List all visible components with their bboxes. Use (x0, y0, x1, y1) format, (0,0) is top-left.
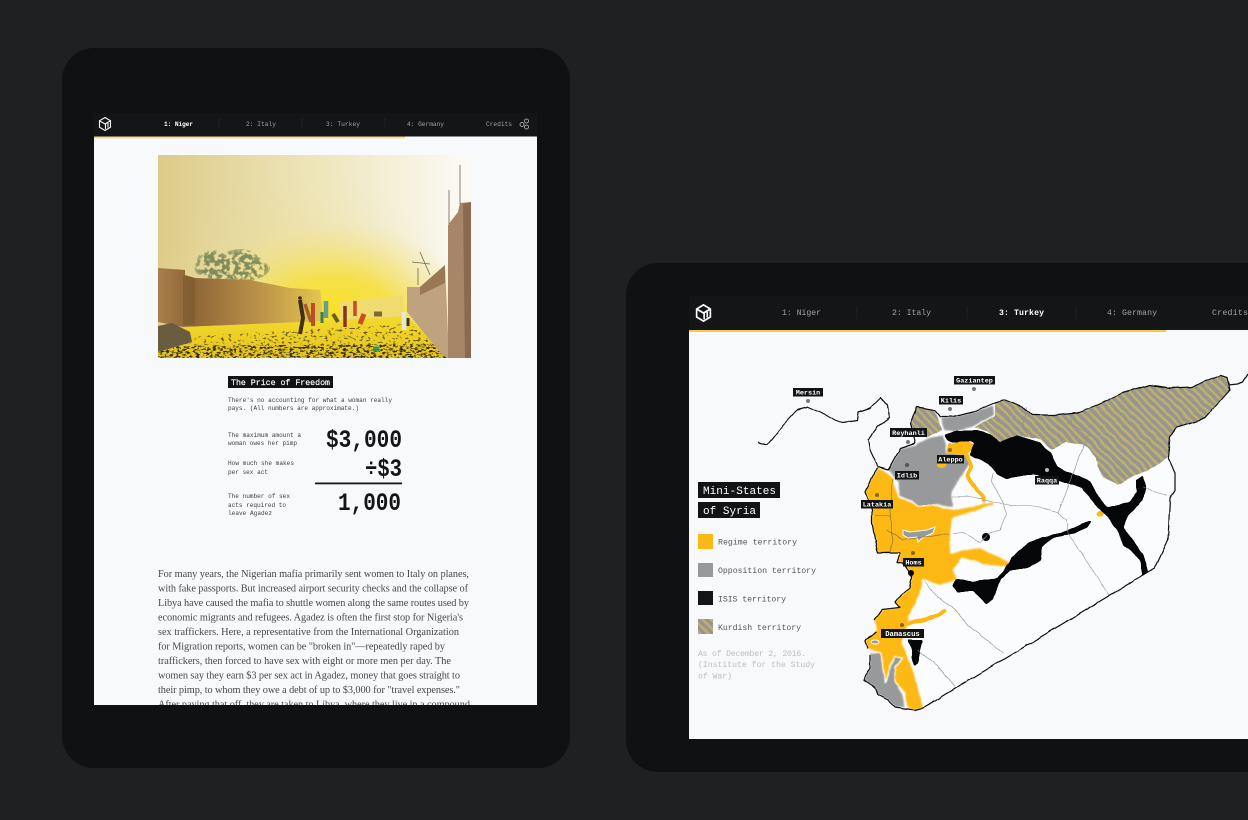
label: Mersin: Mersin (796, 390, 820, 398)
label: Gaziantep: Gaziantep (956, 378, 993, 386)
label: Mersin (793, 388, 823, 396)
map of Syria (758, 374, 1248, 710)
nav item: Turkey: 3: Turkey (999, 308, 1044, 318)
country base (863, 375, 1230, 710)
icon: share (520, 119, 528, 129)
left wall (158, 268, 322, 327)
article paragraph: traffickers, then forced to have sex with eight or more men per day. The (158, 656, 451, 667)
legend: Kurdish (698, 619, 801, 634)
label: Idlib: Idlib (897, 473, 917, 481)
label: Raqqa (1035, 476, 1059, 484)
nav item: Credits: Credits (486, 121, 512, 128)
navigation bar (689, 296, 1248, 330)
legend: opposition: Opposition territory (718, 566, 816, 576)
label: Gaziantep (954, 376, 995, 384)
division rule (315, 482, 402, 484)
reading progress bar (689, 330, 1166, 332)
row: result: 1,000 (338, 489, 401, 518)
city dots (806, 387, 1049, 627)
row: maximum debt: $3,000 (326, 426, 402, 455)
label: Reyhanli: Reyhanli (892, 430, 925, 438)
legend title (698, 482, 780, 518)
tablet bezel (626, 263, 1248, 772)
opposition territory (863, 405, 995, 707)
label: Aleppo: Aleppo (938, 457, 963, 465)
article paragraph: economic migrants and refugees. Agadez is often the first stop for Nigeria's (158, 612, 463, 624)
label: Aleppo (937, 455, 964, 464)
article paragraph: Libya have caused the mafia to shuttle women along the same routes used by (158, 598, 470, 609)
turkish coast line (758, 374, 1248, 467)
article paragraph: sex traffickers. Here, a representative from the International Organization (158, 627, 459, 638)
article paragraph (158, 569, 471, 710)
panel heading: The Price of Freedom (231, 378, 330, 388)
tablet screen (94, 113, 537, 705)
panel intro (228, 397, 392, 412)
row: result (228, 489, 401, 518)
legend: regime (698, 534, 797, 549)
article paragraph: with fake passports. But increased airport security checks and the collapse of (158, 584, 469, 594)
map legend (698, 482, 816, 682)
label: Latakia (861, 500, 893, 508)
article paragraph: women say they earn $3 per sex act in Agadez, money that goes straight to (158, 670, 460, 682)
legend title: Mini-States (703, 486, 776, 498)
label: Damascus (881, 629, 924, 639)
people (298, 296, 408, 334)
nav item: Italy: 2: Italy (246, 121, 276, 128)
reading progress bar (94, 136, 405, 138)
label: Idlib (895, 471, 919, 480)
legend: ISIS: ISIS territory (718, 594, 786, 604)
row: result: leave Agadez (228, 510, 272, 517)
photo: street in Agadez (158, 155, 471, 358)
row: per sex act: How much she makes (228, 460, 294, 467)
ground (158, 316, 452, 358)
article paragraph: for Migration reports, women can be "broken in"—repeatedly raped by (158, 642, 446, 652)
antennas (412, 165, 460, 285)
ISIS pockets (908, 533, 990, 576)
legend: ISIS (698, 591, 786, 605)
row: result: acts required to (228, 502, 286, 509)
source note: As of December 2, 2016. (698, 649, 806, 659)
nav item: Niger: 1: Niger (782, 308, 821, 318)
far buildings (340, 295, 403, 322)
row: per sex act (228, 455, 402, 484)
right walls (407, 265, 449, 358)
navigation bar (94, 113, 537, 136)
label: Homs (903, 558, 924, 566)
legend: Kurdish: Kurdish territory (718, 623, 801, 633)
nav item: Germany: 4: Germany (407, 121, 444, 128)
nav item: Italy: 2: Italy (892, 308, 931, 318)
row: result: The number of sex (228, 493, 290, 500)
panel intro: There's no accounting for what a woman really (228, 397, 392, 404)
tablet screen (689, 296, 1248, 739)
data panel: The Price of Freedom (228, 376, 402, 518)
panel intro: pays. (All numbers are approximate.) (228, 405, 359, 412)
row: per sex act: ÷$3 (365, 455, 402, 484)
row: maximum debt: woman owes her pimp (228, 440, 297, 447)
article paragraph: For many years, the Nigerian mafia primarily sent women to Italy on planes, (158, 569, 469, 580)
legend: opposition (698, 563, 816, 577)
row: per sex act: per sex act (228, 469, 268, 476)
tablet bezel (62, 48, 570, 768)
source note: of War) (698, 672, 732, 682)
article paragraph: After paying that off, they are taken to Libya, where they live in a compound (158, 700, 471, 710)
legend title: of Syria (703, 506, 756, 518)
label: Latakia: Latakia (863, 502, 891, 510)
article paragraph: their pimp, to whom they owe a debt of up to $3,000 for "travel expenses." (158, 685, 460, 696)
Kurdish territory (910, 375, 1230, 485)
opposition pockets (871, 527, 935, 644)
ISIS territory (908, 431, 1148, 665)
icon: logo (100, 118, 110, 130)
legend: regime: Regime territory (718, 538, 797, 548)
tree (194, 249, 270, 283)
debris (158, 324, 452, 358)
label: Kilis (939, 396, 963, 404)
row: maximum debt (228, 426, 402, 455)
regime territory (865, 440, 1104, 710)
left tablet (62, 48, 570, 768)
label: Kilis: Kilis (941, 398, 961, 406)
icon: logo (697, 305, 710, 321)
nav item: Germany: 4: Germany (1107, 309, 1157, 318)
nav item: Niger: 1: Niger (164, 121, 193, 128)
row: maximum debt: The maximum amount a (228, 432, 301, 439)
label: Raqqa: Raqqa (1037, 478, 1057, 486)
right tablet (626, 263, 1248, 772)
label: Damascus: Damascus (885, 631, 920, 639)
label: Homs: Homs (905, 560, 922, 568)
country border (863, 375, 1230, 710)
source note: (Institute for the Study (698, 660, 815, 670)
source note (698, 649, 815, 682)
rubble (158, 323, 192, 352)
nav item: Turkey: 3: Turkey (326, 121, 360, 128)
provincial borders (875, 407, 1170, 687)
nav item: Credits: Credits (1212, 308, 1248, 318)
